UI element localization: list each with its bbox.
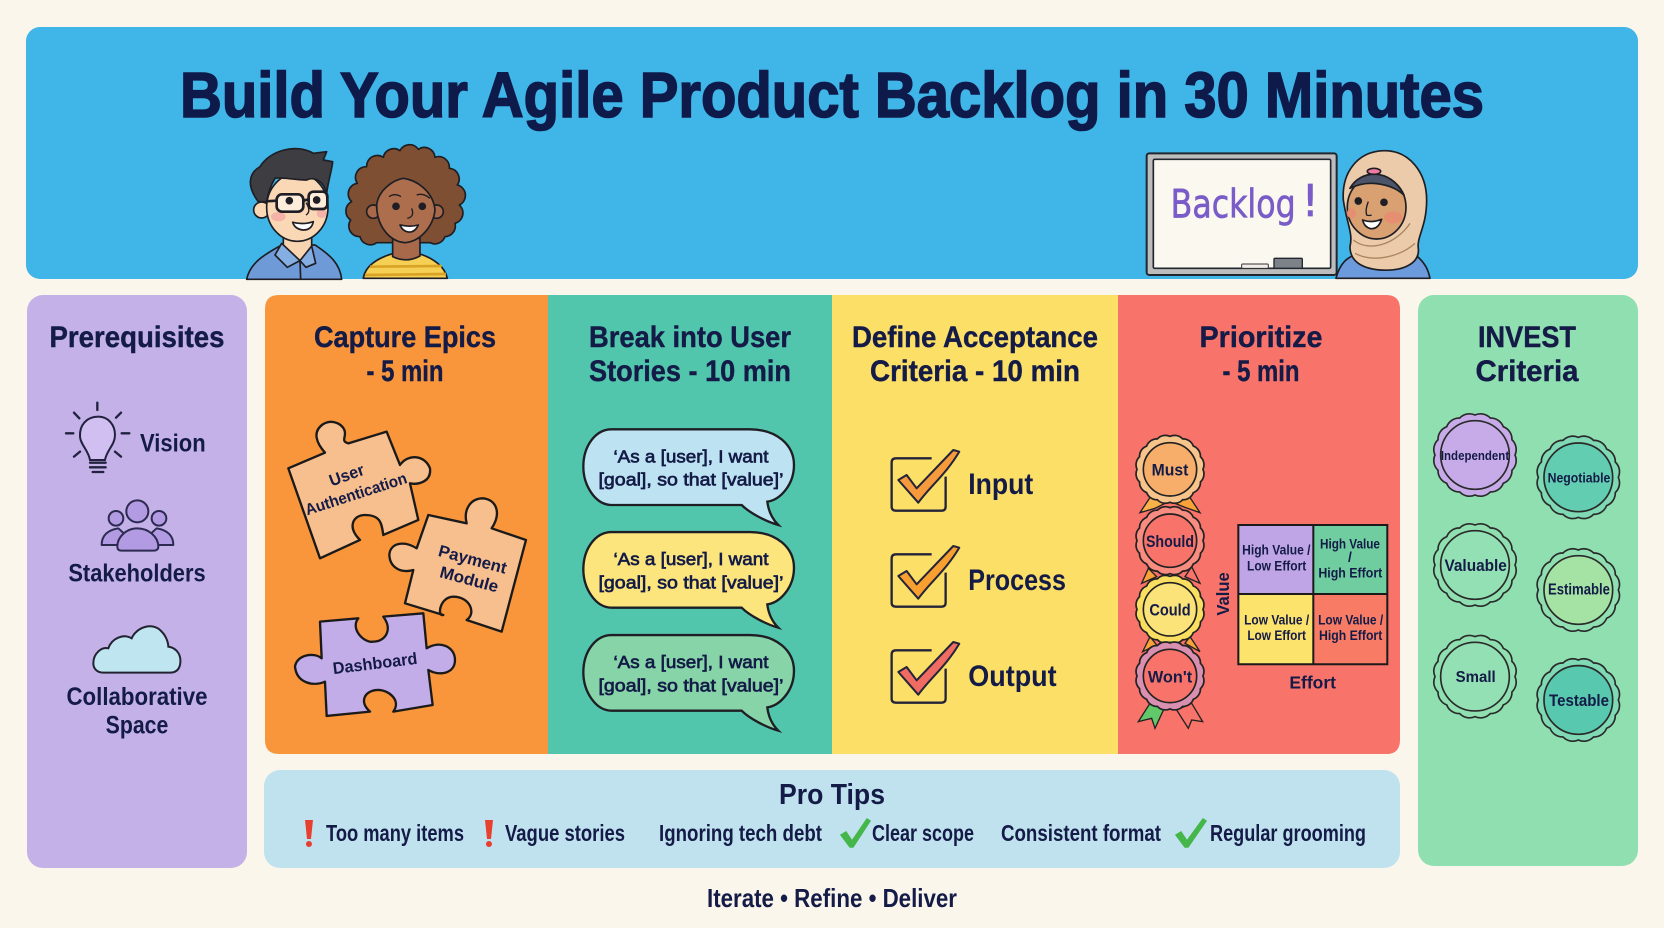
illustration: whiteboard reading Backlog: !: [1302, 177, 1319, 227]
icon: stakeholders group with label: [68, 500, 206, 588]
heading: define acceptance criteria: [852, 321, 1098, 388]
puzzle piece: Payment Module: Module: [438, 563, 501, 596]
title: Build Your Agile Product Backlog in 30 Minutes: [180, 59, 1484, 131]
badge: Must: Must: [1152, 461, 1189, 480]
icon: stakeholders group with label: Stakeholders: [68, 560, 206, 588]
icon: light bulb with Vision label: Vision: [140, 430, 206, 458]
tip: too many items: Too many items: [326, 820, 464, 846]
checklist item: Process: Process: [968, 564, 1066, 597]
badge: Testable: Testable: [1549, 691, 1609, 710]
icon: cloud with Collaborative Space label: Collaborative: [66, 683, 207, 711]
value effort matrix: High Value /: [1242, 541, 1311, 557]
speech bubble: green: [goal], so that [value]’: [598, 675, 783, 695]
icon: warning mark: [485, 820, 493, 847]
speech bubble: blue: [583, 429, 794, 525]
badge: Estimable: [1537, 549, 1620, 631]
badge: Must: [1136, 435, 1204, 513]
value effort matrix: Low Value /: [1244, 612, 1309, 628]
speech bubble: yellow: [583, 532, 794, 628]
panel: pro tips: [264, 770, 1400, 868]
puzzle piece: User Authentication: User: [327, 460, 367, 490]
speech bubble: green: [583, 635, 794, 731]
icon: light bulb with Vision label: [66, 403, 206, 472]
icon: cloud with Collaborative Space label: [66, 626, 207, 739]
illustration: woman in hijab: [1336, 151, 1430, 278]
badge: Small: Small: [1456, 669, 1496, 686]
heading: define acceptance criteria: Define Acceptance: [852, 321, 1098, 354]
panel: invest criteria: [1418, 295, 1638, 866]
icon: check mark: [841, 819, 870, 847]
puzzle piece: User Authentication: Authentication: [303, 470, 409, 519]
illustration: man with glasses: [247, 149, 342, 279]
footer tagline: Iterate • Refine • Deliver: [707, 883, 957, 913]
tip: ignoring tech debt: Ignoring tech debt: [659, 820, 822, 846]
puzzle piece: Dashboard: [295, 613, 455, 716]
speech bubble: yellow: ‘As a [user], I want: [613, 549, 769, 569]
checklist item: Input: Input: [968, 468, 1033, 501]
tip: clear scope: Clear scope: [872, 820, 974, 846]
panel: capture epics: [265, 295, 548, 754]
panel: break into user stories: [548, 295, 832, 754]
icon: check mark: [1176, 819, 1206, 847]
heading: prioritize: [1200, 321, 1322, 388]
heading: define acceptance criteria: Criteria - 10 min: [870, 355, 1080, 388]
value effort matrix: High Effort: [1318, 565, 1383, 581]
value effort matrix: Low Value /: [1318, 612, 1383, 628]
heading: break into user stories: [589, 321, 791, 388]
icon: warning mark: [305, 820, 313, 847]
badge: Could: Could: [1149, 601, 1191, 620]
badge: Valuable: Valuable: [1444, 556, 1507, 575]
badge: Should: [1136, 507, 1204, 583]
illustration: whiteboard reading Backlog: [1147, 153, 1337, 275]
heading: pro tips: Pro Tips: [779, 779, 885, 811]
axis label: Value: Value: [1213, 572, 1233, 616]
heading: break into user stories: Stories - 10 min: [589, 355, 791, 388]
tip: vague stories: Vague stories: [505, 820, 625, 846]
value effort matrix: Low Effort: [1247, 627, 1306, 643]
heading: capture epics: - 5 min: [366, 355, 444, 388]
value effort matrix: High Value: [1320, 535, 1380, 551]
checklist item: Process: [892, 546, 1066, 607]
badge: Won't: Won't: [1148, 667, 1193, 686]
speech bubble: blue: ‘As a [user], I want: [613, 446, 769, 466]
tip: regular grooming: Regular grooming: [1210, 820, 1366, 846]
badge: Could: [1136, 575, 1204, 652]
speech bubble: blue: [goal], so that [value]’: [598, 470, 783, 490]
value effort matrix: /: [1348, 549, 1352, 565]
axis label: Effort: Effort: [1289, 673, 1336, 693]
badge: Should: Should: [1146, 532, 1194, 551]
speech bubble: green: ‘As a [user], I want: [613, 652, 769, 672]
heading: prerequisites: Prerequisites: [50, 321, 224, 354]
header banner: [26, 27, 1638, 279]
heading: prioritize: Prioritize: [1200, 321, 1322, 354]
heading: prioritize: - 5 min: [1222, 355, 1300, 388]
panel: define acceptance criteria: [832, 295, 1118, 754]
badge: Valuable: [1434, 524, 1516, 606]
puzzle piece: Dashboard: Dashboard: [332, 649, 418, 678]
checklist item: Output: [892, 642, 1057, 703]
heading: invest criteria: [1476, 321, 1579, 388]
puzzle piece: Payment Module: Payment: [436, 541, 509, 578]
badge: Testable: [1537, 659, 1620, 741]
heading: invest criteria: Criteria: [1476, 355, 1579, 388]
badge: Independent: [1434, 414, 1516, 496]
badge: Negotiable: Negotiable: [1548, 470, 1610, 486]
puzzle piece: Payment Module: [389, 498, 526, 632]
value effort matrix: [1213, 525, 1387, 693]
badge: Estimable: Estimable: [1548, 582, 1610, 599]
heading: capture epics: [314, 321, 496, 388]
puzzle piece: User Authentication: [288, 422, 430, 558]
badge: Small: [1434, 635, 1516, 718]
panel: prioritize: [1118, 295, 1400, 754]
checklist item: Output: Output: [968, 660, 1057, 693]
badge: Independent: Independent: [1441, 448, 1510, 463]
badge: Won't: [1136, 642, 1204, 728]
illustration: whiteboard reading Backlog: Backlog: [1171, 182, 1296, 227]
value effort matrix: Low Effort: [1247, 558, 1307, 574]
heading: capture epics: Capture Epics: [314, 321, 496, 354]
tip: consistent format: Consistent format: [1001, 820, 1161, 846]
panel: prerequisites: [27, 295, 247, 868]
heading: break into user stories: Break into User: [589, 321, 791, 354]
icon: cloud with Collaborative Space label: Space: [106, 711, 168, 739]
checklist item: Input: [892, 450, 1033, 511]
speech bubble: yellow: [goal], so that [value]’: [598, 572, 783, 592]
heading: invest criteria: INVEST: [1478, 321, 1576, 354]
value effort matrix: High Effort: [1319, 627, 1383, 643]
illustration: woman with curly hair: [346, 145, 465, 278]
badge: Negotiable: [1537, 436, 1620, 519]
